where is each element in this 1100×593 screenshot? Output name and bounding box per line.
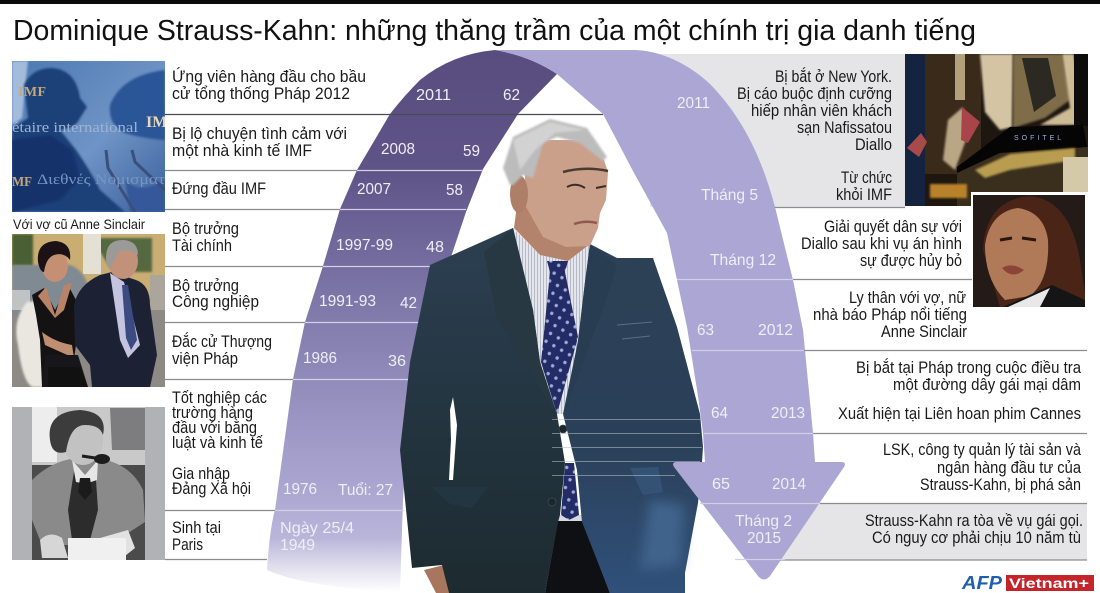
left timeline text: Đảng Xã hội (172, 480, 251, 498)
right arrow dates and ages: 63 (697, 322, 714, 339)
left arc dates and ages: Ngày 25/4 (280, 520, 354, 537)
left timeline text: một nhà kinh tế IMF (172, 142, 312, 160)
right arrow dates and ages: 2012 (758, 322, 793, 339)
right timeline text: Diallo sau khi vụ án hình (801, 235, 962, 253)
lower tie (561, 463, 579, 520)
photo: Nafissatou Diallo (971, 192, 1088, 310)
left timeline text: đầu với bằng (172, 418, 257, 437)
left arc dates and ages: 2007 (357, 181, 391, 198)
hand (424, 565, 449, 593)
right pocket flap (630, 467, 663, 495)
left timeline text: Tài chính (172, 237, 232, 255)
left timeline text (172, 67, 366, 554)
left arc dates and ages: 1949 (280, 537, 315, 554)
neck (514, 205, 590, 261)
photo: IMF silhouette: Διεθνές Νομισματ (37, 172, 165, 188)
hair (503, 119, 607, 185)
right timeline text: Bị bắt ở New York. (775, 67, 892, 86)
left timeline text: Sinh tại (172, 519, 221, 537)
top black bar (0, 0, 1100, 4)
right arrow dates and ages (677, 95, 806, 547)
mouth (574, 222, 597, 224)
left arc dates and ages: 48 (426, 239, 444, 256)
photo: Sofitel hotel: SOFITEL (1014, 135, 1064, 142)
left arc dates and ages: 58 (446, 182, 463, 199)
photo: IMF silhouette: IMF (18, 85, 46, 100)
left timeline text: Ứng viên hàng đầu cho bầu (172, 67, 366, 86)
right arrow dates and ages: Tháng 2 (735, 513, 792, 530)
left lapel (484, 228, 555, 412)
right timeline text: Bị bắt tại Pháp trong cuộc điều tra (856, 358, 1082, 377)
logo: AFP: AFP (961, 573, 1003, 593)
left timeline text: Bị lộ chuyện tình cảm với (172, 125, 347, 143)
left timeline text: luật và kinh tế (172, 434, 263, 452)
photo: IMF silhouette: IMF (146, 114, 177, 131)
right timeline text: Anne Sinclair (881, 323, 967, 341)
suit left panel (400, 228, 565, 593)
trousers (545, 520, 610, 593)
eyes (567, 185, 606, 188)
left arc dates and ages: 62 (503, 87, 520, 104)
eyebrows (563, 169, 608, 172)
left pocket flap (432, 487, 488, 508)
left timeline text: Công nghiệp (172, 293, 259, 311)
suit right panel (563, 244, 703, 593)
buttons (548, 425, 567, 506)
gap between arm and body (449, 397, 457, 480)
left timeline text: viện Pháp (172, 350, 238, 368)
panel: grey background for 2015 trial (770, 503, 1087, 560)
right timeline text: Ly thân với vợ, nữ (849, 289, 966, 307)
face (525, 140, 608, 247)
left arc dates and ages: 2008 (381, 141, 415, 158)
arc: rising dark band (267, 50, 557, 592)
right timeline text: Từ chức (841, 169, 892, 187)
left timeline text: trường hàng (172, 404, 253, 422)
thin lines over the suit (552, 420, 702, 476)
right timeline text: Diallo (855, 136, 892, 154)
right timeline text: hiếp nhân viên khách (751, 102, 892, 120)
left timeline text: Gia nhập (172, 465, 230, 483)
right arrow dates and ages: 2013 (771, 405, 805, 422)
right timeline text (737, 67, 1083, 547)
left timeline text: Bộ trưởng (172, 220, 239, 238)
jacket fold highlight (640, 500, 684, 570)
right arrow dates and ages: Tháng 5 (701, 187, 758, 204)
left timeline text: Paris (172, 536, 203, 554)
right arrow dates and ages: 2011 (677, 95, 710, 112)
panel: grey background for New York arrest (650, 54, 905, 207)
right arrow dates and ages: 2015 (747, 530, 781, 547)
left timeline text: Bộ trưởng (172, 277, 239, 295)
lower shirt (558, 515, 582, 521)
left timeline text: Đắc cử Thượng (172, 332, 272, 351)
title: Dominique Strauss-Kahn: những thăng trầm của một chính trị gia danh tiếng (13, 15, 976, 47)
photo: young Strauss-Kahn (12, 407, 165, 560)
caption: with ex-wife: Với vợ cũ Anne Sinclair (13, 216, 145, 232)
photo: IMF silhouette: étaire international (12, 120, 138, 136)
right timeline text: khỏi IMF (836, 186, 892, 204)
right arrow dates and ages: 65 (712, 476, 730, 493)
arrow: falling light band (495, 50, 845, 580)
ear (510, 175, 528, 213)
right arrow dates and ages: Tháng 12 (710, 252, 776, 269)
shirt (513, 228, 590, 414)
right arrow dates and ages: 2014 (772, 476, 806, 493)
right timeline text: nhà báo Pháp nổi tiếng (813, 306, 967, 324)
right timeline text: Giải quyết dân sự với (824, 218, 962, 236)
left arc dates and ages: 1986 (303, 350, 337, 367)
right timeline text: Có nguy cơ phải chịu 10 năm tù (872, 529, 1081, 547)
left arc dates and ages: 36 (388, 353, 406, 370)
tie (541, 261, 578, 414)
person: Dominique Strauss-Kahn (400, 119, 703, 593)
upper hair tuft (513, 122, 585, 170)
right arrow dates and ages: 64 (711, 405, 728, 422)
right timeline text: một đường dây gái mại dâm (893, 376, 1081, 394)
right timeline text: sự được hủy bỏ (860, 252, 962, 270)
left arc dates and ages: Tuổi: 27 (338, 481, 393, 499)
horizontal row lines, right side (677, 208, 1087, 560)
photo: Sofitel hotel (905, 54, 1088, 206)
left arc dates and ages (280, 87, 520, 554)
left arc dates and ages: 42 (400, 295, 417, 312)
left arc dates and ages: 1976 (283, 481, 317, 498)
right timeline text: Strauss-Kahn, bị phá sản (920, 476, 1081, 494)
right timeline text: Bị cáo buộc định cưỡng (737, 85, 892, 103)
left arc dates and ages: 59 (463, 143, 480, 160)
photo: IMF silhouette: MF (12, 175, 32, 190)
right timeline text: sạn Nafissatou (797, 119, 892, 137)
photo: IMF silhouette (12, 61, 177, 212)
photo: couple (12, 234, 165, 387)
breast pocket (617, 322, 652, 339)
horizontal row lines, left side (165, 114, 603, 560)
left timeline text: Tốt nghiệp các (172, 389, 267, 407)
left arc dates and ages: 1991-93 (319, 293, 376, 310)
left timeline text: Đứng đầu IMF (172, 180, 266, 198)
logo: Vietnam+: Vietnam+ (1009, 575, 1089, 591)
left arc dates and ages: 2011 (416, 87, 451, 104)
left arc dates and ages: 1997-99 (336, 237, 393, 254)
right timeline text: ngân hàng đầu tư của (937, 459, 1082, 477)
right lapel (565, 244, 617, 412)
left timeline text: cử tổng thống Pháp 2012 (172, 85, 350, 103)
